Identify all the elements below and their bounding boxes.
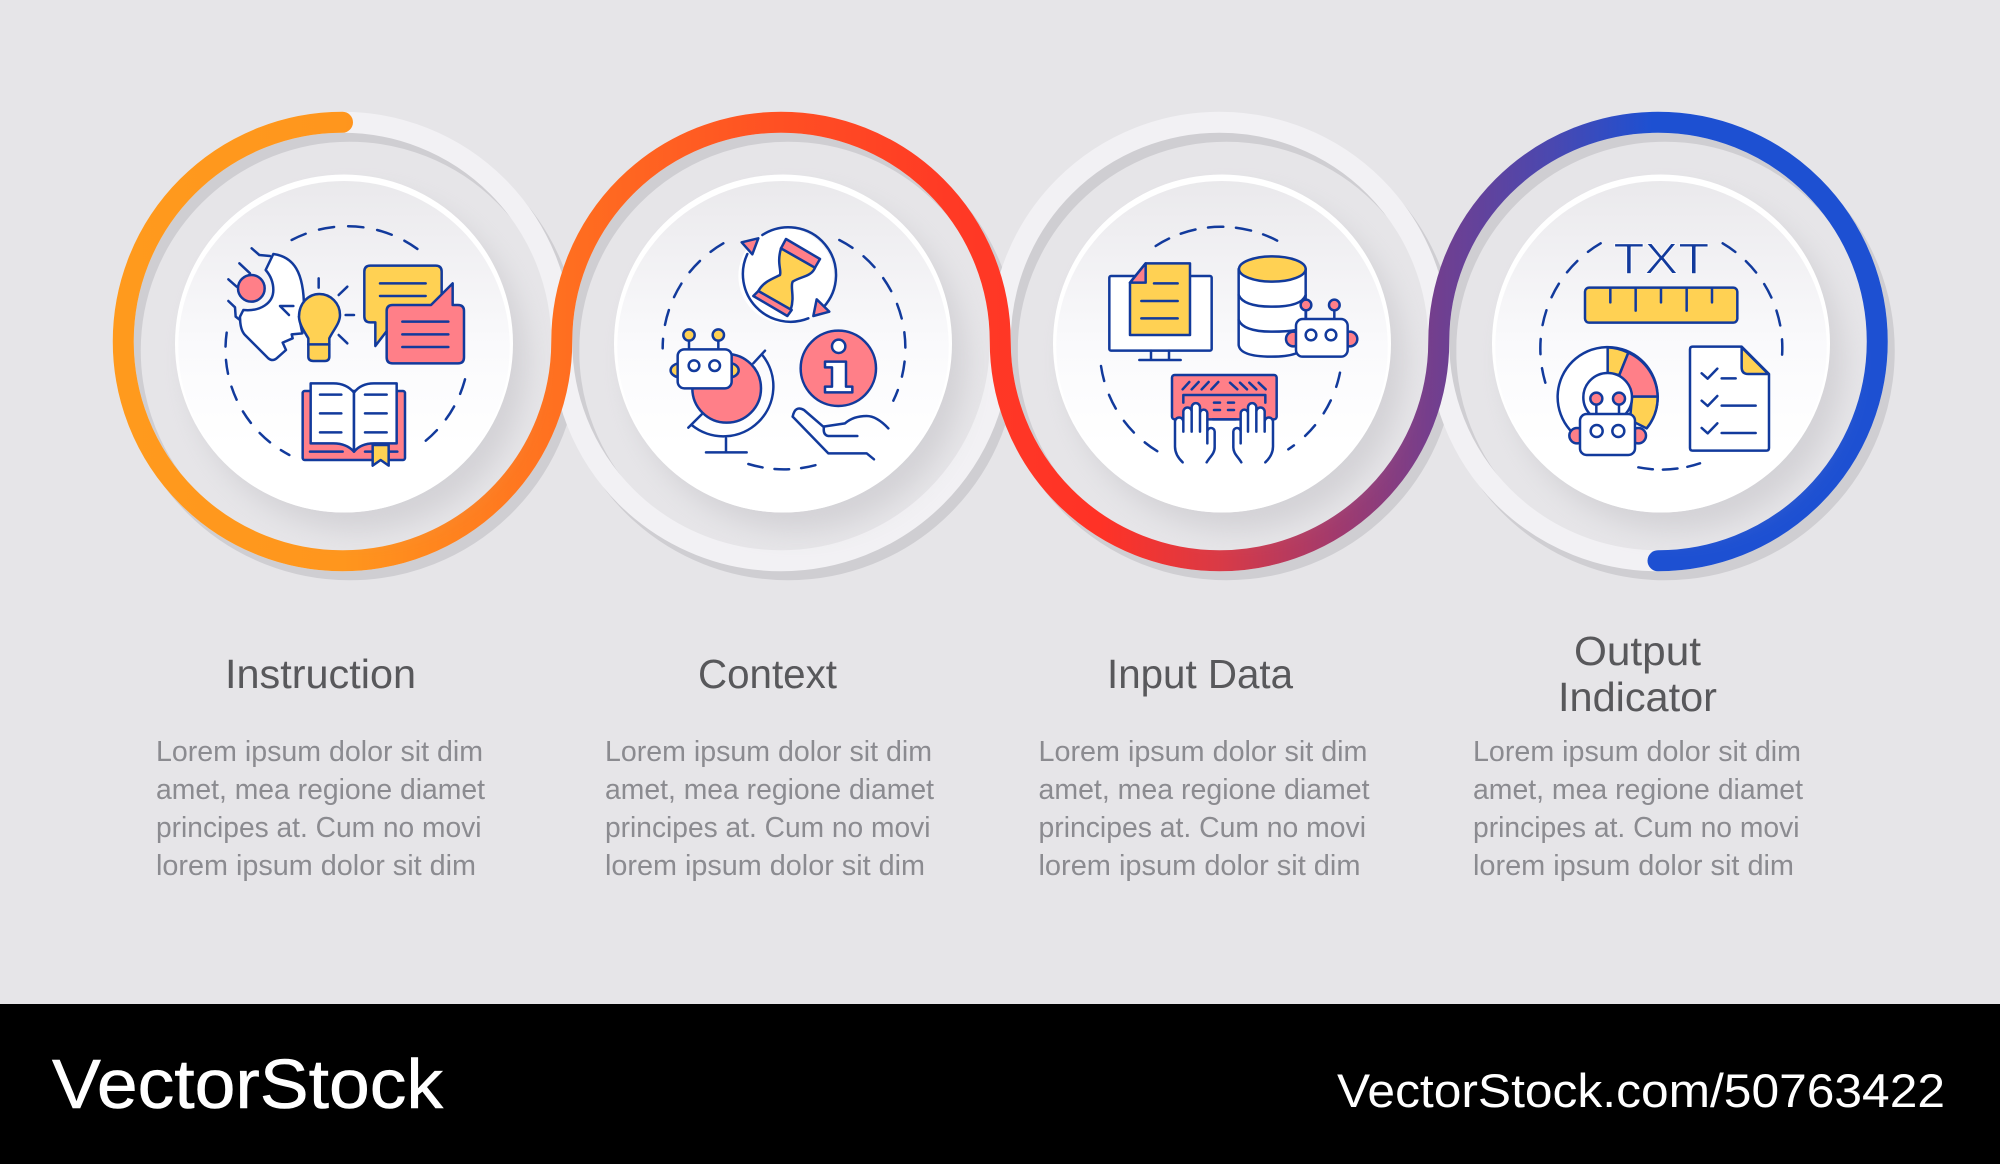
ring shadows <box>130 131 1884 570</box>
body text: Output Indicator: amet, mea regione diamet <box>1473 774 1803 806</box>
body text: Input Data: Lorem ipsum dolor sit dim <box>1038 736 1368 768</box>
body text: Output Indicator: Lorem ipsum dolor sit dim <box>1473 736 1801 768</box>
body text: Instruction: Lorem ipsum dolor sit dim <box>156 736 483 768</box>
body text: Context: principes at. Cum no movi <box>605 812 930 844</box>
panel: output indicator disk and icon <box>1492 174 1844 530</box>
heading: Output Indicator <box>1558 628 1717 720</box>
heading: Output Indicator: Indicator <box>1558 674 1717 720</box>
body text: Input Data <box>1038 736 1370 882</box>
gradient progress ribbon <box>123 122 1877 561</box>
icon: output indicator: TXT <box>1613 234 1709 283</box>
body text: Input Data: principes at. Cum no movi <box>1038 812 1366 844</box>
heading: Output Indicator: Output <box>1574 628 1702 674</box>
heading: Instruction: Instruction <box>225 651 416 697</box>
body text: Instruction: lorem ipsum dolor sit dim <box>156 850 476 882</box>
icon: output indicator <box>1540 234 1782 470</box>
body text: Instruction: principes at. Cum no movi <box>156 812 482 844</box>
body text: Instruction <box>156 736 485 882</box>
footer band <box>0 1004 2000 1164</box>
footer logo: VectorStock <box>52 1045 444 1123</box>
icon: context <box>663 227 905 469</box>
panel: context disk and icon <box>614 174 966 530</box>
heading: Input Data: Input Data <box>1107 651 1293 697</box>
body text: Input Data: amet, mea regione diamet <box>1038 774 1370 806</box>
body text: Context: amet, mea regione diamet <box>605 774 934 806</box>
heading: Context: Context <box>698 651 838 697</box>
body text: Context: lorem ipsum dolor sit dim <box>605 850 925 882</box>
panel: input data disk and icon <box>1053 174 1405 530</box>
body text: Input Data: lorem ipsum dolor sit dim <box>1038 850 1360 882</box>
panel: instruction disk and icon <box>175 174 527 530</box>
icon: input data <box>1101 227 1357 462</box>
body text: Output Indicator <box>1473 736 1803 882</box>
body text: Instruction: amet, mea regione diamet <box>156 774 485 806</box>
body text: Context: Lorem ipsum dolor sit dim <box>605 736 932 768</box>
icon: instruction <box>225 226 465 466</box>
light unfilled rings <box>123 122 1877 561</box>
footer url: VectorStock.com/50763422 <box>1337 1064 1945 1117</box>
body text: Context <box>605 736 934 882</box>
body text: Output Indicator: lorem ipsum dolor sit dim <box>1473 850 1794 882</box>
body text: Output Indicator: principes at. Cum no movi <box>1473 812 1800 844</box>
